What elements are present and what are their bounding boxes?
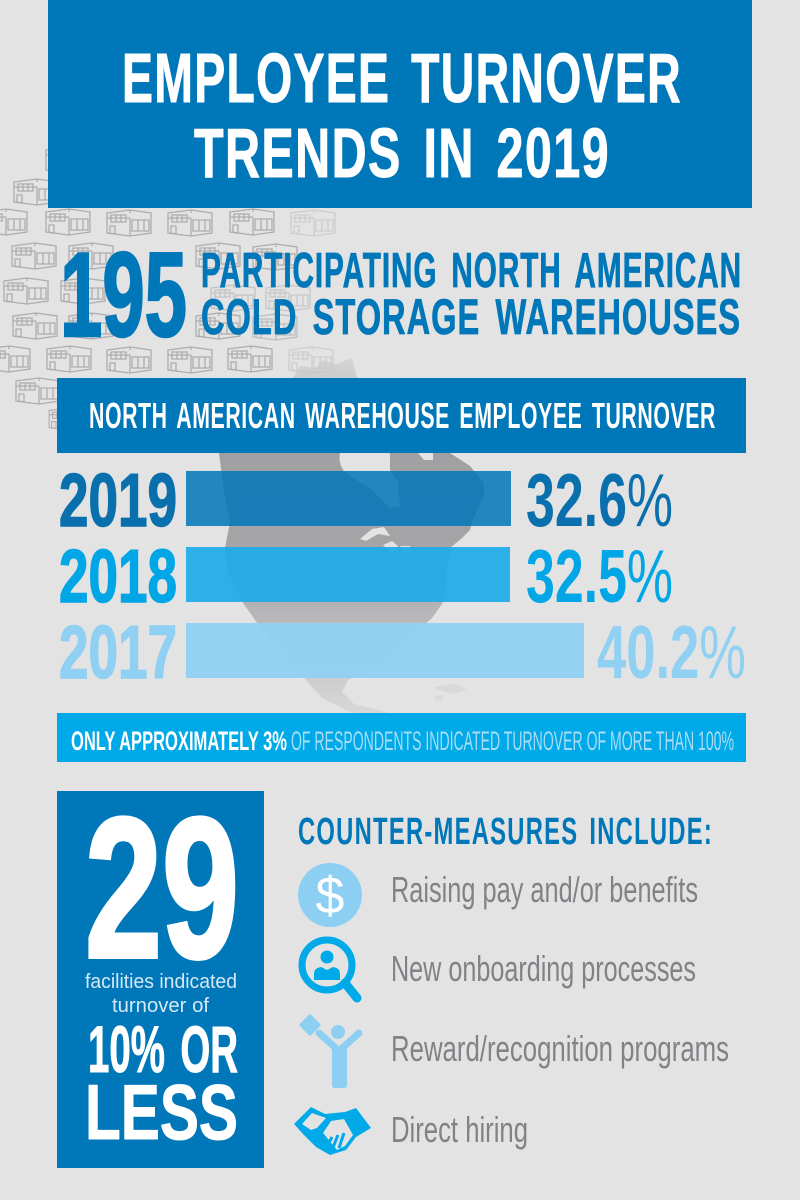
title text [122, 39, 682, 192]
icon: dollar coin: $ [316, 867, 345, 925]
row: 2017 [59, 610, 746, 694]
lakes and bays on the map [360, 453, 433, 553]
title text: TRENDS IN 2019 [194, 114, 610, 192]
stat: 195 participating warehouses [60, 228, 742, 362]
icon: dollar coin [298, 863, 362, 927]
row: 2019: 2019 [59, 458, 177, 542]
map: North America silhouette [219, 358, 484, 716]
row: 2017: 40.2% [597, 610, 746, 694]
facilities caption: facilities indicated [85, 971, 237, 993]
stat: 195 participating warehouses: 195 [60, 228, 187, 362]
10 percent or less: 10% OR [88, 1012, 238, 1086]
chart heading bar [57, 378, 746, 453]
facilities caption: turnover of [112, 995, 209, 1017]
callout: 3 percent note [57, 713, 746, 762]
row: 2018: 2018 [59, 534, 177, 618]
facilities caption [85, 971, 237, 1017]
callout: 3 percent note: ONLY APPROXIMATELY 3% [71, 726, 287, 756]
row: 2019 [59, 458, 673, 542]
panel: 29 facilities [57, 777, 264, 1168]
warehouse icon pattern [0, 147, 335, 430]
icon: handshake [294, 1107, 371, 1155]
bar chart: turnover by year [59, 458, 746, 694]
10 percent or less: LESS [85, 1068, 238, 1156]
row: 2019: 32.6% [526, 458, 673, 542]
row: 2017: 2017 [59, 610, 177, 694]
icon: magnifier with person [302, 940, 357, 998]
counter-measures list [294, 863, 729, 1155]
icon: person holding reward [299, 1014, 359, 1088]
row: 2018 [59, 534, 673, 618]
row: 2018: 32.5% [526, 534, 673, 618]
big number 29: 29 [85, 777, 239, 1000]
10 percent or less [85, 1012, 238, 1156]
title banner [48, 0, 752, 208]
item: direct hiring: Direct hiring [391, 1109, 528, 1150]
